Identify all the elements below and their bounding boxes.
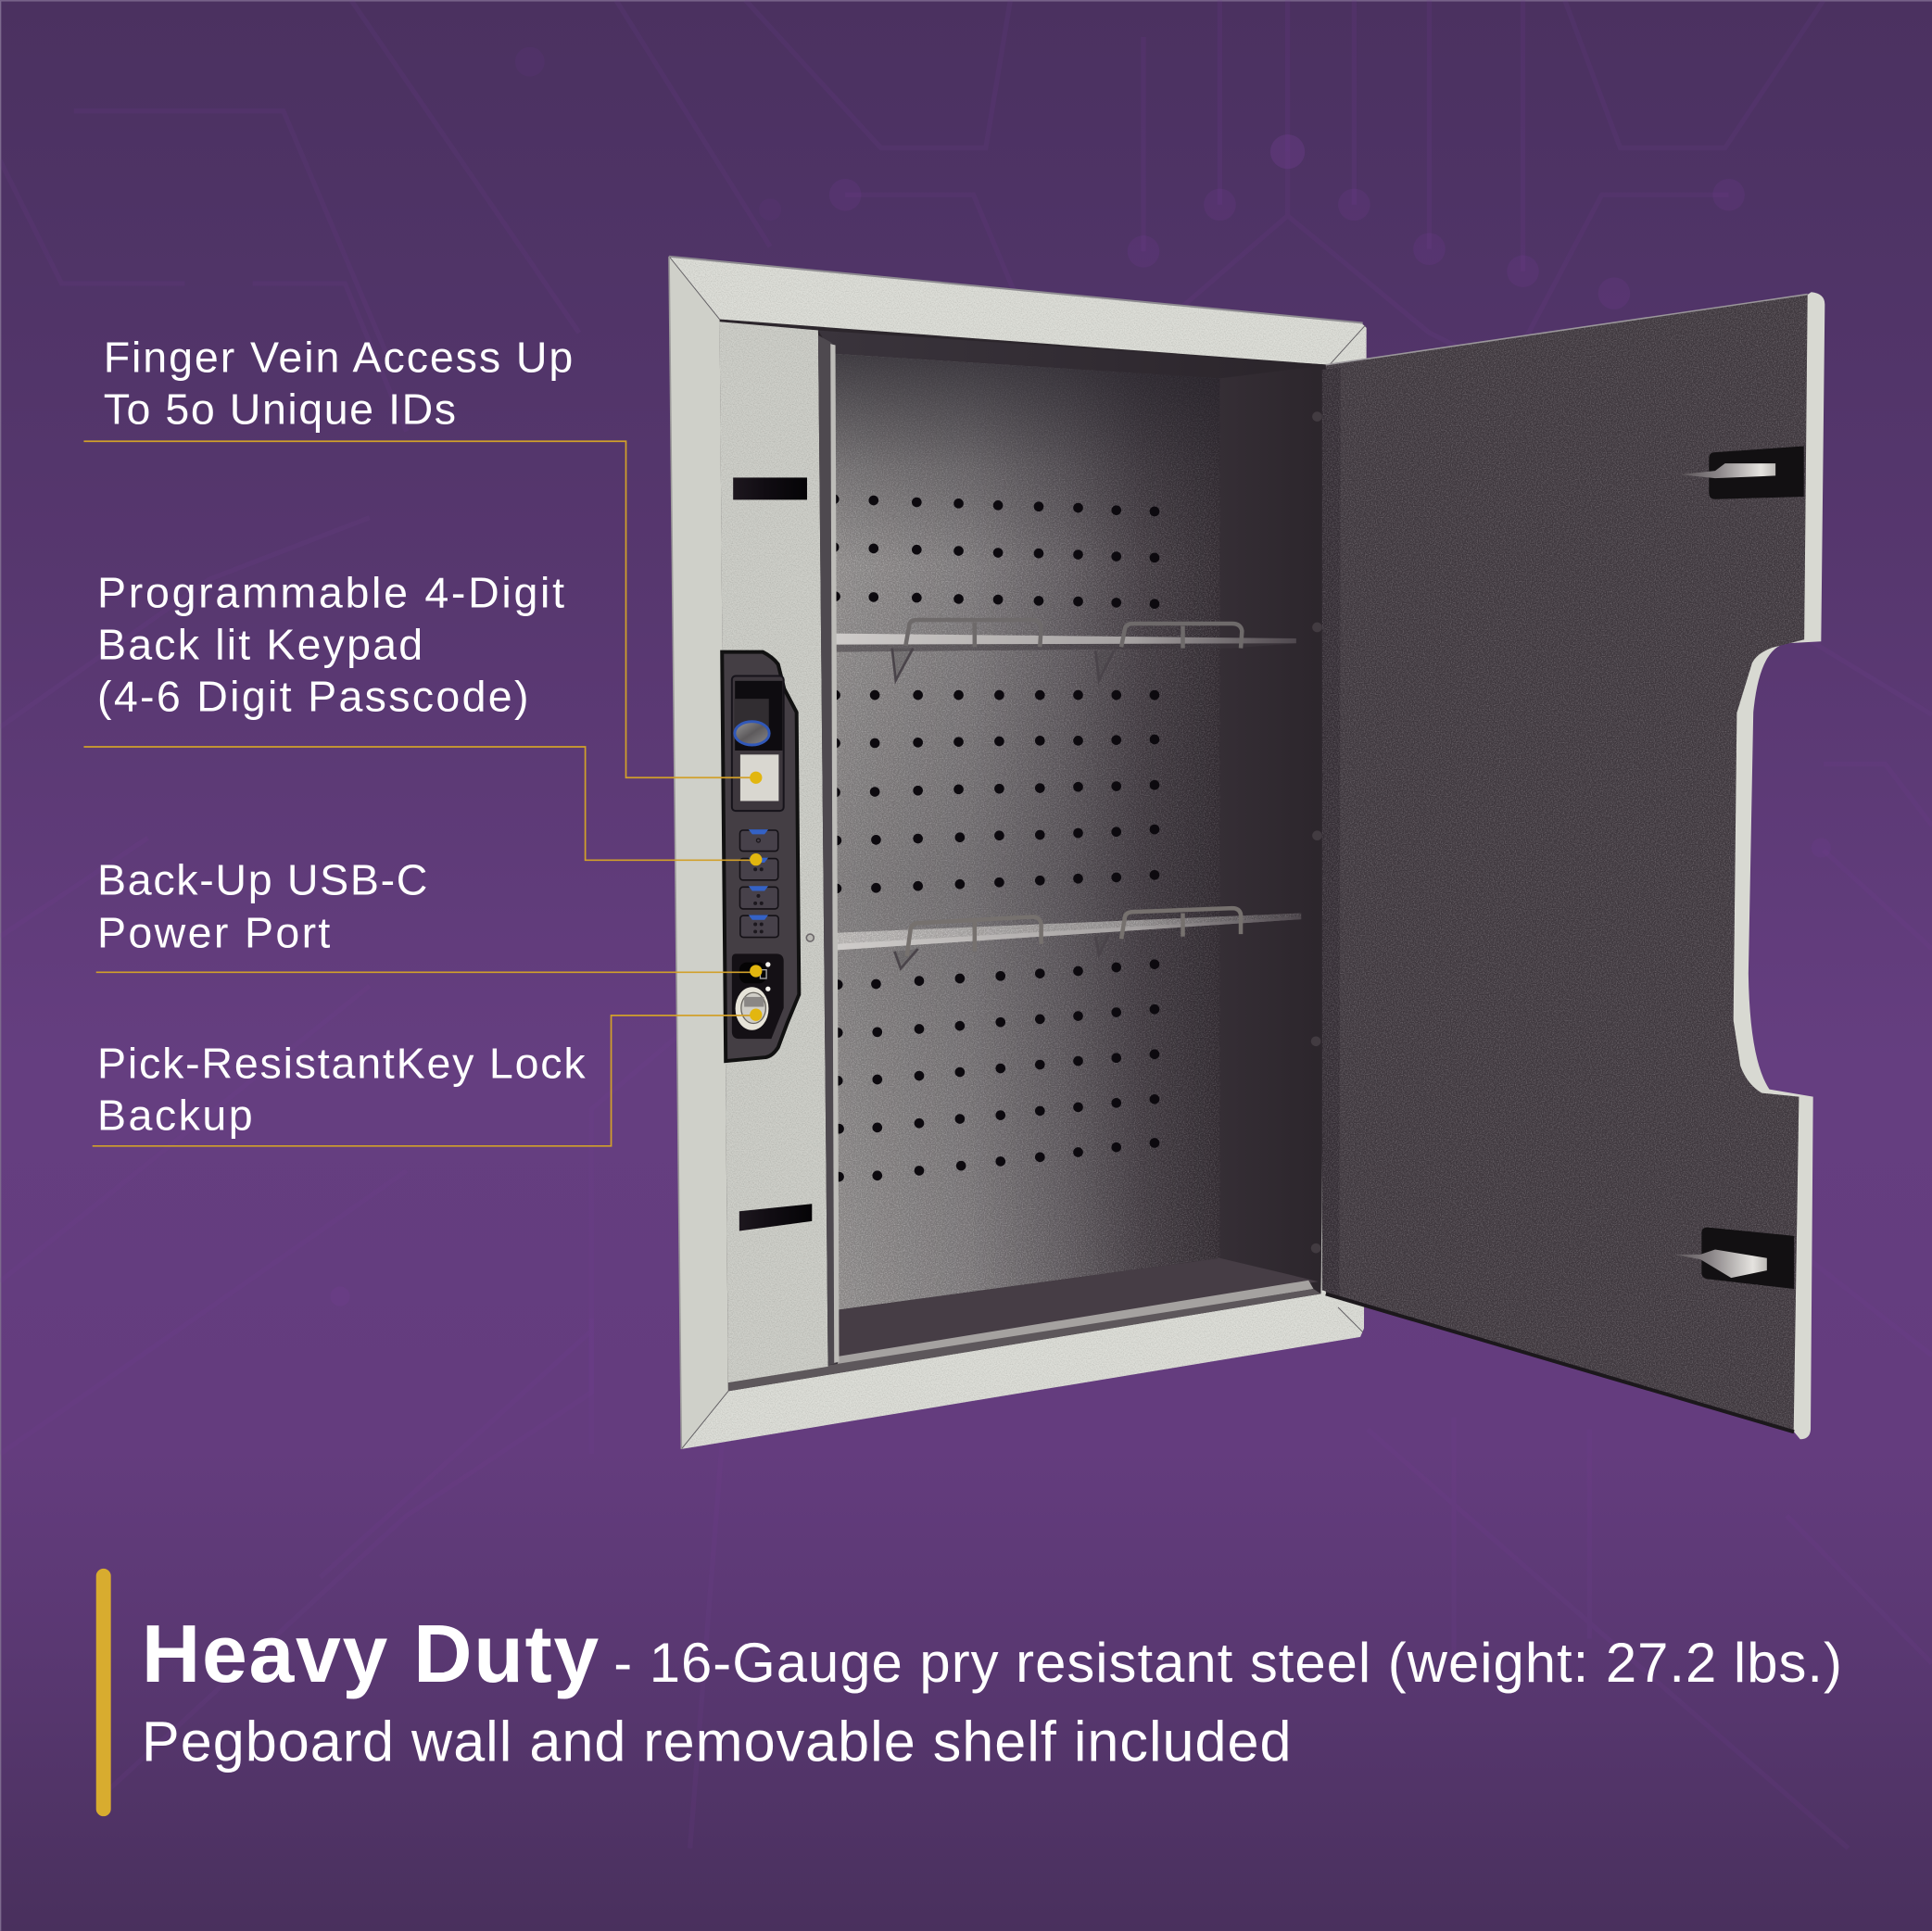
label: finger vein access (104, 334, 573, 434)
label: USB-C port (97, 856, 427, 957)
shelf shadow (834, 643, 1296, 652)
heading: heavy duty: Heavy Duty (142, 1609, 599, 1699)
right side wall (1219, 365, 1330, 1294)
shelf plate (834, 634, 1296, 645)
label: keypad (97, 569, 564, 720)
accent bar (96, 1569, 111, 1816)
biometric keypad module (722, 652, 799, 1061)
shadow strip below interior (728, 1289, 1320, 1391)
lower shelf (837, 908, 1301, 968)
label: finger vein access: To 5o Unique IDs (104, 385, 456, 434)
label: key lock (97, 1040, 586, 1140)
background circuit nodes (330, 47, 1831, 1306)
label: key lock: Pick-ResistantKey Lock (97, 1040, 586, 1088)
indicator lights (766, 965, 770, 989)
label: key lock: Backup (97, 1092, 253, 1140)
safe body (669, 257, 1825, 1449)
keypad button 2 (739, 858, 778, 880)
shelf brackets (894, 934, 1109, 968)
keypad button 1 (739, 829, 778, 852)
keypad button 3 (739, 886, 778, 909)
callout markers (750, 772, 762, 1021)
leader line: key lock (93, 1016, 755, 1146)
label: keypad: (4-6 Digit Passcode) (97, 672, 528, 720)
leader line: finger vein (83, 441, 755, 777)
wire racks (907, 908, 1241, 956)
lower latch (1673, 1228, 1794, 1289)
lower slot (739, 1204, 812, 1231)
open door (1322, 292, 1825, 1439)
door dark face (1326, 295, 1808, 1431)
door hinge flange (1322, 367, 1341, 1295)
subheading: pegboard: Pegboard wall and removable shelf included (142, 1710, 1292, 1773)
label: keypad: Programmable 4-Digit (97, 569, 564, 617)
wire racks (905, 620, 1242, 649)
label: USB-C port: Power Port (97, 909, 330, 957)
pegboard holes (834, 499, 1155, 1177)
post dark side (818, 335, 838, 1365)
outer frame (669, 257, 1367, 1449)
left control panel (720, 322, 828, 1382)
wall screws (1311, 411, 1322, 1253)
ceiling (818, 331, 1330, 378)
finger reader (732, 676, 784, 811)
USB-C port (739, 963, 766, 983)
door white edge (1719, 292, 1825, 1439)
leader line: keypad (83, 747, 755, 860)
shelf plate (837, 913, 1301, 950)
key lock cylinder (736, 987, 768, 1030)
small screw hole (806, 934, 814, 941)
label: USB-C port: Back-Up USB-C (97, 856, 427, 904)
cabinet opening (720, 320, 1330, 1391)
cabinet floor (838, 1258, 1319, 1359)
subheading: steel gauge: - 16-Gauge pry resistant steel (weight: 27.2 lbs.) (613, 1632, 1842, 1694)
label: keypad: Back lit Keypad (97, 621, 423, 669)
label: finger vein access: Finger Vein Access Up (104, 334, 573, 382)
shelf brackets (892, 649, 1114, 680)
lock recess (732, 953, 784, 1039)
post light edge (830, 344, 840, 1363)
keypad button 4 (740, 915, 778, 938)
leader line: USB-C (96, 971, 755, 973)
module body (722, 652, 799, 1061)
back pegboard wall (833, 354, 1219, 1310)
upper shelf (834, 620, 1296, 680)
floor front lip (837, 1281, 1313, 1365)
upper latch (1679, 447, 1804, 499)
upper slot (733, 477, 807, 499)
